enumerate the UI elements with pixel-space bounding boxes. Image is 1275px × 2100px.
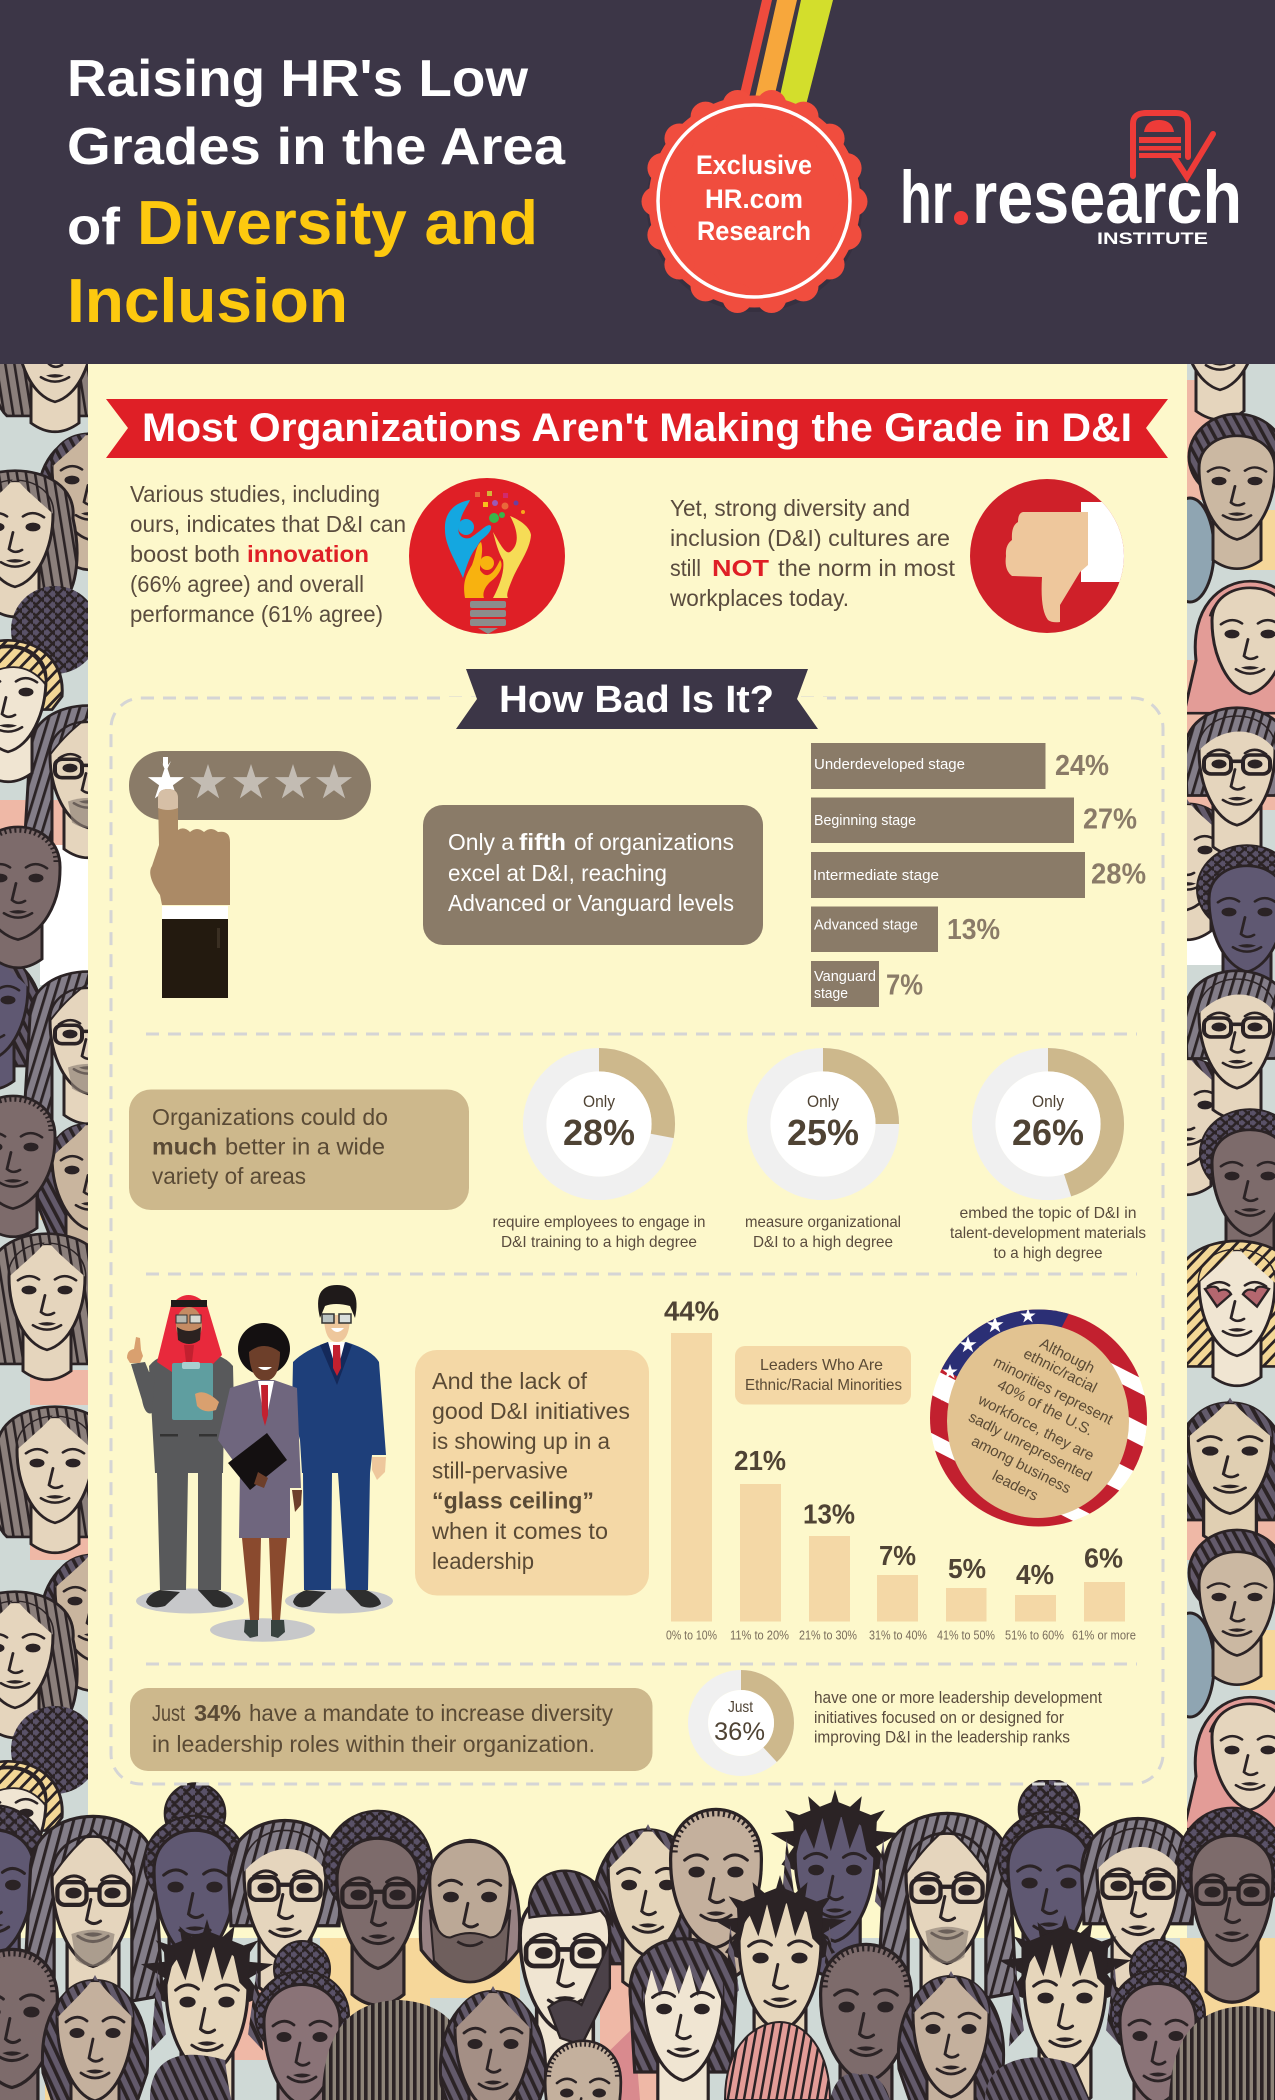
column chart: leaders who are minorities: 6% <box>1084 1542 1123 1574</box>
callout: US flag circle <box>930 1310 1147 1526</box>
crowd border: right column <box>1187 364 1275 1938</box>
caption: training: D&I training to a high degree <box>501 1234 697 1251</box>
callout: glass ceiling <box>415 1350 649 1596</box>
donut: 26%: Only <box>1032 1092 1064 1111</box>
column chart: leaders who are minorities: 7% <box>879 1540 916 1571</box>
crowd: bottom <box>0 1779 1275 2100</box>
callout: mandate: have a mandate to increase diversity <box>249 1700 613 1726</box>
callout: only a fifth: Advanced or Vanguard levels <box>448 890 734 916</box>
heading: how bad is it <box>447 669 827 729</box>
callout: US flag circle: among business <box>969 1433 1074 1497</box>
callout: US flag circle: workforce, they are <box>974 1391 1097 1465</box>
text: leadership initiatives <box>814 1689 1102 1746</box>
column chart: leaders who are minorities: 41% to 50% <box>937 1628 995 1642</box>
bar chart: D&I stage: 13% <box>947 914 1000 946</box>
text: not the norm: NOT <box>712 555 769 581</box>
icon: light bulb with people <box>409 478 565 634</box>
text: innovation <box>130 481 406 627</box>
logo: hr.research institute: INSTITUTE <box>1097 229 1208 248</box>
icon: thumbs down <box>970 479 1130 633</box>
column chart: leaders who are minorities: 4% <box>1016 1559 1054 1590</box>
callout: glass ceiling: “glass ceiling” <box>432 1488 594 1514</box>
title: Inclusion <box>67 267 348 336</box>
column chart: leaders who are minorities: 5% <box>948 1553 986 1584</box>
callout: could do much better: much <box>152 1134 217 1160</box>
bar chart: D&I stage: 28% <box>1091 858 1146 890</box>
text: not the norm: Yet, strong diversity and <box>670 495 910 521</box>
callout: US flag circle: Although <box>1037 1335 1097 1377</box>
icon: clipboard and check <box>1133 113 1213 177</box>
bar chart: D&I stage: 7% <box>886 970 923 1002</box>
donut: 36%: Just <box>728 1699 753 1716</box>
crowd clothing backdrop <box>0 1930 1275 2100</box>
column chart: leaders who are minorities: 11% to 20% <box>730 1628 789 1642</box>
column chart: leaders who are minorities: 13% <box>803 1498 855 1530</box>
badge: exclusive research: Exclusive <box>696 150 812 180</box>
callout: mandate: Just <box>152 1700 185 1726</box>
illustration: business people <box>127 1285 393 1642</box>
donut: 25%: 25% <box>787 1112 859 1153</box>
callout: only a fifth: fifth <box>519 829 566 855</box>
callout: only a fifth: excel at D&I, reaching <box>448 860 667 886</box>
woman with folder <box>210 1323 315 1642</box>
text: innovation: (66% agree) and overall <box>130 571 364 597</box>
donut: 25%: Only <box>807 1092 839 1111</box>
man in grey suit with keffiyeh <box>127 1295 244 1614</box>
back row of faces <box>0 1779 1275 2005</box>
callout: could do much better: better in a wide <box>225 1134 385 1160</box>
bar chart: D&I stage: stage <box>814 985 848 1002</box>
text: not the norm <box>669 495 956 611</box>
callout: only a fifth: of organizations <box>574 829 734 855</box>
callout: glass ceiling: And the lack of <box>432 1368 587 1394</box>
caption: embed <box>950 1205 1146 1262</box>
middle row of faces <box>0 1871 1205 2100</box>
text: leadership initiatives: initiatives focused on or designed for <box>814 1709 1064 1727</box>
crowd border: left column <box>0 364 88 1834</box>
bar chart: D&I stage: Beginning stage <box>814 812 916 829</box>
caption: measure: D&I to a high degree <box>753 1234 893 1251</box>
badge: exclusive research <box>646 96 862 312</box>
logo: hr.research institute <box>900 113 1242 248</box>
callout: glass ceiling: when it comes to <box>431 1518 608 1544</box>
caption: embed: talent-development materials <box>950 1225 1146 1242</box>
logo: hr.research institute: hr <box>900 156 952 239</box>
donut: 36%: 36% <box>714 1718 765 1746</box>
heading: how bad is it: How Bad Is It? <box>499 679 774 721</box>
text: innovation: ours, indicates that D&I can <box>130 511 406 537</box>
column chart: leaders who are minorities: 21% <box>734 1445 786 1476</box>
text: innovation: innovation <box>247 541 369 567</box>
red banner heading <box>106 399 1168 458</box>
badge: exclusive research: Research <box>697 216 811 246</box>
front row of faces <box>150 1986 1275 2100</box>
callout: glass ceiling: still-pervasive <box>432 1458 568 1484</box>
callout: glass ceiling: leadership <box>432 1548 534 1574</box>
callout: could do much better: variety of areas <box>152 1163 306 1189</box>
bar chart: D&I stage: Advanced stage <box>814 916 918 934</box>
header band <box>0 0 1275 364</box>
text: not the norm: still <box>670 555 701 581</box>
text: not the norm: inclusion (D&I) cultures are <box>670 525 950 551</box>
chart title box: Ethnic/Racial Minorities <box>745 1377 902 1394</box>
caption: embed: embed the topic of D&I in <box>960 1205 1136 1222</box>
text: innovation: performance (61% agree) <box>130 601 383 627</box>
callout: US flag circle: 40% of the U.S. <box>994 1377 1096 1439</box>
callout: glass ceiling: is showing up in a <box>432 1428 611 1454</box>
donut: 28%: Only <box>583 1092 615 1111</box>
title: Raising HR's Low <box>67 50 529 108</box>
rating pill with stars <box>129 751 371 820</box>
donut: 25% <box>759 1060 887 1188</box>
column chart: leaders who are minorities: 21% to 30% <box>799 1628 857 1642</box>
badge: exclusive research: HR.com <box>705 184 803 214</box>
donut: 26%: 26% <box>1012 1112 1084 1153</box>
chart title box: Leaders Who Are <box>760 1357 883 1374</box>
callout: mandate: 34% <box>194 1700 241 1726</box>
callout: mandate <box>130 1688 652 1771</box>
man in blue suit <box>285 1285 393 1614</box>
title: Diversity and <box>137 189 538 258</box>
column chart: leaders who are minorities: 51% to 60% <box>1005 1628 1064 1642</box>
column chart: leaders who are minorities: 31% to 40% <box>869 1628 927 1642</box>
text: not the norm: workplaces today. <box>669 585 849 611</box>
caption: measure: measure organizational <box>745 1214 901 1231</box>
text: leadership initiatives: improving D&I in the leadership ranks <box>814 1728 1070 1746</box>
callout: US flag circle: minorities represent <box>991 1354 1116 1429</box>
logo: hr.research institute: research <box>972 156 1242 239</box>
icon: pointing hand and sleeve <box>150 789 230 998</box>
callout: could do much better: Organizations could do <box>152 1104 388 1130</box>
medal ribbon <box>739 0 833 105</box>
column chart: leaders who are minorities: 0% to 10% <box>666 1628 717 1642</box>
dashed panel outline <box>111 698 1163 1784</box>
bar chart: D&I stage: Vanguard <box>814 968 876 985</box>
red banner heading: Most Organizations Aren't Making the Grade in D&I <box>142 406 1132 450</box>
caption: training <box>492 1214 706 1251</box>
title: Grades in the Area <box>67 118 566 176</box>
caption: embed: to a high degree <box>994 1245 1103 1262</box>
callout: US flag circle: sadly unrepresented <box>966 1409 1094 1485</box>
chart title box <box>735 1346 911 1404</box>
title: of <box>67 198 121 256</box>
callout: only a fifth <box>423 805 763 945</box>
column chart: leaders who are minorities: 44% <box>664 1296 719 1326</box>
column chart: leaders who are minorities: 61% or more <box>1072 1628 1136 1642</box>
donut: 36% <box>698 1680 784 1766</box>
bar chart: D&I stage: Underdeveloped stage <box>814 756 965 773</box>
caption: training: require employees to engage in <box>492 1214 706 1231</box>
callout: mandate: in leadership roles within their organization. <box>152 1731 595 1757</box>
donut: 28%: 28% <box>563 1112 635 1153</box>
callout: only a fifth: Only a <box>448 829 515 855</box>
callout: US flag circle: ethnic/racial <box>1021 1345 1100 1397</box>
callout: US flag circle: leaders <box>989 1467 1041 1505</box>
title <box>67 50 566 336</box>
column chart: leaders who are minorities <box>664 1296 1136 1642</box>
caption: measure <box>745 1214 901 1251</box>
donut: 26% <box>984 1060 1112 1188</box>
bar chart: D&I stage: 24% <box>1055 750 1109 782</box>
donut: 28% <box>535 1060 663 1188</box>
bar chart: D&I stage: Intermediate stage <box>813 867 939 884</box>
callout: could do much better <box>129 1090 469 1210</box>
text: innovation: Various studies, including <box>130 481 380 507</box>
bar chart: D&I stage: 27% <box>1083 804 1137 836</box>
callout: glass ceiling: good D&I initiatives <box>432 1398 630 1424</box>
text: innovation: boost both <box>130 541 240 567</box>
bar chart: D&I stage <box>811 743 1146 1007</box>
text: not the norm: the norm in most <box>778 555 956 581</box>
text: leadership initiatives: have one or more leadership development <box>814 1689 1102 1707</box>
